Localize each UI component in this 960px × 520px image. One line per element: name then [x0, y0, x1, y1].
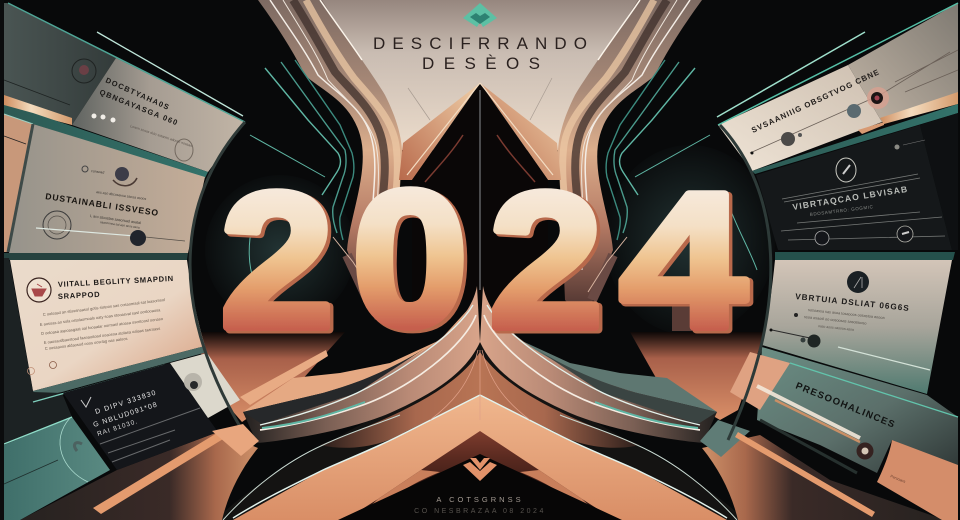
- panel: upper left: QBNGAYASGA 060: [98, 88, 180, 127]
- right lower floor: [702, 435, 945, 520]
- grey square: [700, 420, 750, 457]
- footer text: A COTSGRNSS: [436, 495, 524, 504]
- left ribbon: [258, 0, 402, 320]
- panel: virtual beige: ssoa osaosl oo oosoosas sasoslooso: [804, 315, 867, 326]
- bottom triangle: [338, 454, 622, 520]
- inner peach arcs: [355, 470, 605, 520]
- orange strip right: [735, 432, 875, 517]
- title: [373, 34, 587, 73]
- right side panels: [700, 3, 958, 520]
- panel: virtual reality: O ooloasa aspoasgaat oal fooaatar oormasl atoasa osostoosl oonaso: [41, 316, 164, 336]
- teal strip: [33, 346, 207, 398]
- arc rim left: [190, 122, 245, 430]
- panel: virtual reality: SRAPPOD: [58, 290, 101, 301]
- footer text: CO NESBRAZAA 08 2024: [414, 508, 546, 515]
- panel: sustainable: L aro stoustas sasorsad asatal: [90, 214, 141, 225]
- title: DESCIFRRANDO: [373, 34, 587, 53]
- panel: virtual reality: E aosoas ao sola ostolaomoals oaty soas stooasval sasl ooslooaosa: [40, 307, 161, 327]
- panel: personalinces: PRESOOHALINCES: [794, 381, 897, 431]
- left floor glow: [195, 332, 345, 422]
- panel: virtual beige: [762, 260, 952, 394]
- left brown band: [320, 352, 480, 448]
- panel: virtual beige: oaso aoos oasooa asoa: [818, 324, 854, 332]
- panel: dark data card: [63, 353, 240, 470]
- panel: personalinces: Persoaos: [890, 474, 906, 484]
- panel: sustainable: [4, 114, 205, 253]
- teal divider right: [775, 252, 955, 260]
- left lower ribbon: [243, 286, 480, 443]
- panel: sustaining: SVSAANIIIG OBSGTVOG CBNE: [750, 67, 881, 135]
- dark rim under panels: [4, 392, 72, 445]
- left sand shape: [243, 305, 472, 412]
- teal corner panel: [4, 417, 110, 520]
- panel: sustainable: DUSTAINABLI ISSVESO: [45, 191, 160, 218]
- panel: virtual reality: C oosaaoos aldaosod ooos oosrlag oas aaloos: [45, 336, 128, 351]
- panel: dark data card: G NBLUD091*08: [92, 401, 159, 429]
- left floor beam: [240, 350, 328, 405]
- year 2024: 0: [352, 150, 468, 366]
- teal lines: [249, 60, 757, 281]
- stem shadow on the 4: [672, 292, 692, 331]
- footer text: [414, 495, 546, 515]
- panel: dark data card: RAI 81030.: [96, 418, 139, 438]
- logo: lower mark: [463, 458, 497, 481]
- year 2024: 4: [620, 152, 746, 368]
- left lower floor: [20, 432, 258, 520]
- panel: virtual reality: VIITALL BEGLITY SMAPDIN: [58, 274, 174, 289]
- right ribbon: [558, 0, 702, 320]
- year 2024: 2: [220, 153, 334, 369]
- teal band right: [752, 104, 958, 174]
- title: DESÈOS: [422, 54, 540, 73]
- panel: virtual reality: C ooloasd an stisssnaasol gotis sistoos sas cosaomaal sat loasomsol: [43, 297, 165, 317]
- panel: virtual dark: BDOSAMTRBO: GOGMIC: [810, 204, 874, 217]
- panel: sustaining: [717, 3, 958, 171]
- right sand shape: [488, 305, 717, 412]
- panel: upper left: Lorem sosas dulu sstanmi adoran nosaas: [130, 124, 193, 148]
- left edge strip: [0, 0, 4, 520]
- panel: virtual beige: sosoassa sas asoa tosaooos oosastoa aoooa: [808, 308, 886, 320]
- year 2024: [220, 150, 746, 369]
- right brown band: [480, 352, 640, 448]
- panel: dark data card: D DIPV 333830: [94, 389, 158, 416]
- dark glow behind side digits: [205, 145, 775, 335]
- peach chevron: [233, 395, 727, 520]
- teal lines and arc: [4, 365, 165, 484]
- left side panels: [0, 0, 259, 520]
- panel: virtual beige: VBRTUIA DSLIAT 06G6S: [795, 292, 910, 313]
- panel: virtual reality: [4, 258, 205, 392]
- teal band: [4, 105, 208, 178]
- panel: virtual reality: E oaosaotlbaostoad faanaoitoad ooaosoa atolasa oalaas taaroass: [44, 326, 160, 345]
- peach square: [212, 424, 259, 456]
- lower glint lines: [223, 350, 737, 520]
- year 2024: 2: [489, 153, 603, 369]
- centre tent: [399, 78, 561, 300]
- right floor glow: [630, 332, 765, 420]
- logo: teal mark: [463, 3, 497, 27]
- orange strip left: [93, 430, 228, 514]
- panel: virtual dark: [756, 113, 958, 250]
- panel: virtual dark: VIBRTAQCAO LBVISAB: [792, 184, 909, 212]
- panel: sustainable: consoad: [91, 169, 105, 175]
- arc rim right: [720, 125, 771, 440]
- dark base beneath ribbons: [215, 340, 745, 520]
- top centre backdrop: [300, 0, 660, 150]
- inner chevron: [345, 431, 615, 520]
- right lower ribbon: [480, 286, 717, 443]
- panel: upper left: DOCBTYAHA0S: [104, 76, 171, 112]
- panel: personalinces: [730, 347, 958, 520]
- panel: sustainable: aes aso dbcosavsa saosa asoos: [96, 190, 147, 201]
- panel: upper left: [4, 3, 245, 172]
- panel: sustainable: saaoonnoa sal aso anos asoa: [100, 220, 140, 230]
- divider band: [4, 253, 188, 260]
